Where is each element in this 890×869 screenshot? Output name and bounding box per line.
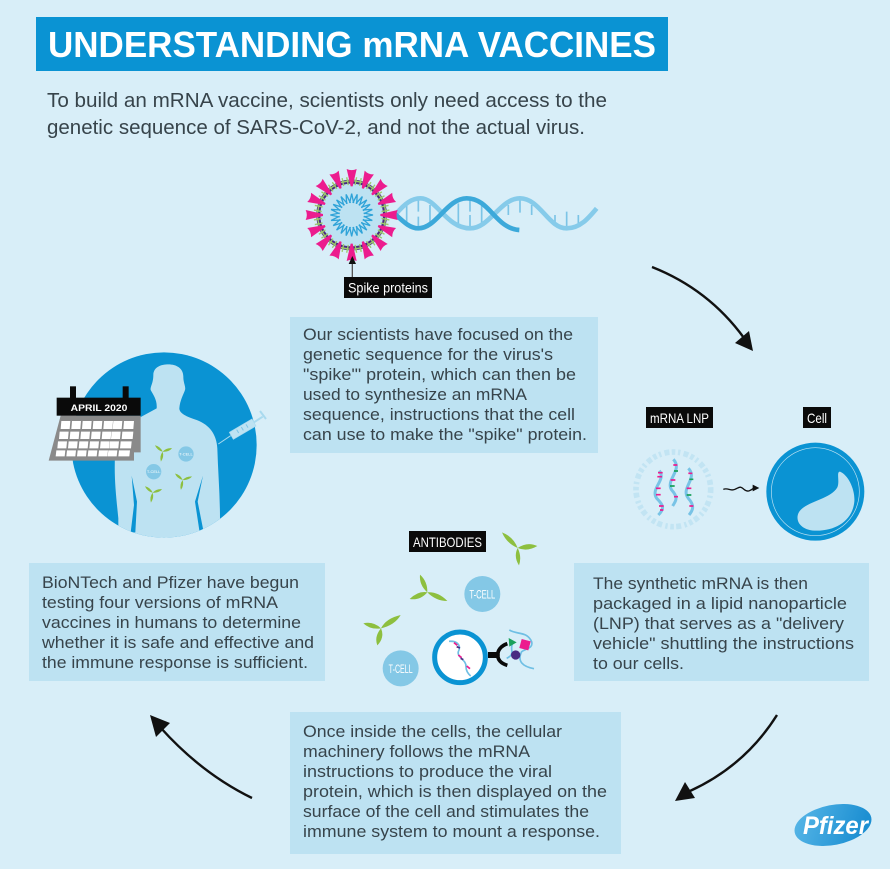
panel: lipid nanoparticle packaging: The synthetic mRNA is then xyxy=(593,574,808,593)
label: mRNA LNP: mRNA LNP xyxy=(650,410,709,426)
intro text xyxy=(47,90,607,139)
panel: cellular machinery xyxy=(290,712,621,854)
antibody receptor and antigen xyxy=(488,630,534,669)
panel: spike protein explanation: used to synthesize an mRNA xyxy=(303,385,528,404)
intro text: genetic sequence of SARS-CoV-2, and not the actual virus. xyxy=(47,117,585,139)
label: cell xyxy=(803,407,831,428)
T-cells: T-CELL xyxy=(469,588,496,602)
arrow: left xyxy=(150,715,252,798)
panel: testing in humans: BioNTech and Pfizer have begun xyxy=(42,573,299,592)
panel: spike protein explanation: sequence, instructions that the cell xyxy=(303,405,575,424)
wavy arrow xyxy=(723,485,759,491)
label: cell: Cell xyxy=(807,410,827,426)
cell with mRNA xyxy=(435,632,485,683)
panel: lipid nanoparticle packaging: to our cells. xyxy=(593,654,684,673)
panel: lipid nanoparticle packaging: (LNP) that serves as a "delivery xyxy=(593,614,845,633)
panel: cellular machinery: machinery follows the mRNA xyxy=(303,742,531,761)
syringe xyxy=(218,411,266,444)
panel: cellular machinery: Once inside the cells, the cellular xyxy=(303,722,562,741)
panel: lipid nanoparticle packaging: packaged in a lipid nanoparticle xyxy=(593,594,847,613)
label: antibodies xyxy=(409,531,486,552)
panel: testing in humans: vaccines in humans to determine xyxy=(42,613,301,632)
label: antibodies: ANTIBODIES xyxy=(413,534,482,550)
icon: antibodies, T-cells and antigen binding xyxy=(363,532,537,686)
panel: spike protein explanation: genetic sequence for the virus's xyxy=(303,345,553,364)
calendar: APRIL 2020 xyxy=(71,403,127,413)
calendar xyxy=(49,386,141,461)
icon: lipid nanoparticle and cell xyxy=(636,443,864,541)
body silhouette xyxy=(115,364,220,545)
virus xyxy=(306,169,398,261)
spike pointer arrow xyxy=(349,256,356,277)
panel: testing in humans: testing four versions of mRNA xyxy=(42,593,279,612)
T-cells: T-CELL xyxy=(389,662,413,676)
panel: lipid nanoparticle packaging xyxy=(574,563,869,681)
antibodies and T-cells inside the body: T-CELL xyxy=(179,451,194,456)
panel: cellular machinery: instructions to produce the viral xyxy=(303,762,552,781)
label: spike proteins: Spike proteins xyxy=(348,280,428,296)
icon: virus with DNA helix xyxy=(306,169,597,277)
title: UNDERSTANDING mRNA VACCINES xyxy=(48,24,656,65)
panel: spike protein explanation: can use to make the "spike" protein. xyxy=(303,425,587,444)
logo: Pfizer xyxy=(791,798,875,852)
panel: cellular machinery: surface of the cell and stimulates the xyxy=(303,802,589,821)
panel: lipid nanoparticle packaging: vehicle" shuttling the instructions xyxy=(593,634,854,653)
panel: testing in humans: whether it is safe and effective and xyxy=(41,633,314,652)
antibodies and T-cells inside the body: T-CELL xyxy=(147,469,161,474)
label: spike proteins xyxy=(344,277,432,298)
panel: cellular machinery: immune system to mount a response. xyxy=(303,822,600,841)
panel: testing in humans: the immune response is sufficient. xyxy=(42,653,308,672)
panel: testing in humans xyxy=(29,563,325,681)
T-cells xyxy=(383,576,500,686)
cell xyxy=(766,443,864,541)
panel: spike protein explanation: Our scientists have focused on the xyxy=(303,325,573,344)
panel: spike protein explanation xyxy=(290,317,598,453)
intro text: To build an mRNA vaccine, scientists only need access to the xyxy=(47,90,607,112)
logo: Pfizer: Pfizer xyxy=(803,812,869,840)
arrow: lower right xyxy=(675,715,777,801)
antibodies and T-cells inside the body xyxy=(139,438,194,504)
lipid nanoparticle xyxy=(636,452,711,527)
icon: human body, calendar and syringe xyxy=(49,352,266,545)
DNA helix xyxy=(395,198,597,230)
arrow: top right xyxy=(652,267,753,351)
panel: cellular machinery: protein, which is then displayed on the xyxy=(303,782,607,801)
panel: spike protein explanation: "spike'" protein, which can then be xyxy=(303,365,576,384)
antibodies xyxy=(363,532,537,645)
label: mRNA LNP xyxy=(646,407,713,428)
